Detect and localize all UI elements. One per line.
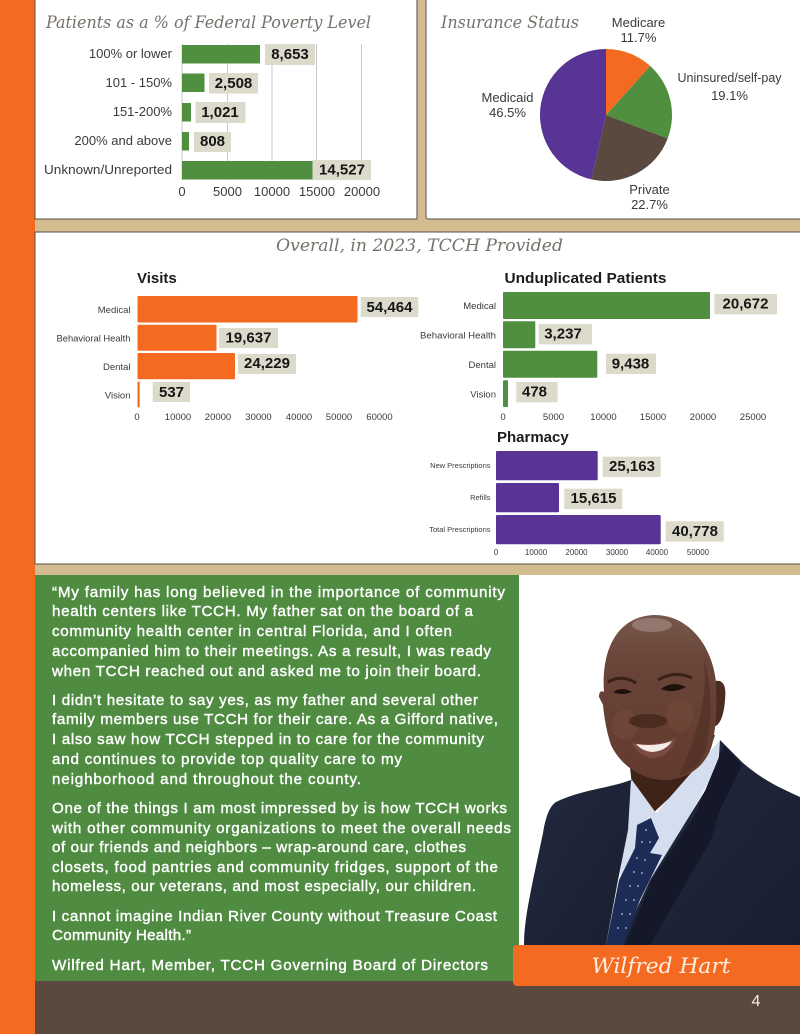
head: [599, 615, 716, 780]
quote paragraph 1: health centers like TCCH. My father sat on the board of a: [52, 603, 474, 620]
chart: unduplicated patients: Vision: [470, 390, 496, 400]
panel: patients as a percent of federal poverty level: [35, 0, 417, 219]
poverty level bar chart: 151-200%: [113, 104, 172, 119]
chart: pharmacy: 30000: [606, 548, 629, 557]
brows: [608, 674, 692, 683]
quote paragraph 1: when TCCH reached out and asked me to join their board.: [51, 663, 481, 680]
heading: poverty level: Patients as a % of Federal Poverty Level: [45, 13, 371, 33]
chart: pharmacy: Total Prescriptions: [429, 525, 491, 534]
chart: visits: 60000: [366, 412, 393, 423]
quote paragraph 4: [52, 908, 498, 944]
pie labels: 19.1%: [711, 88, 748, 103]
chart: visits: 30000: [245, 412, 272, 423]
chart: pharmacy: 0: [494, 548, 499, 557]
quote paragraph 1: “My family has long believed in the importance of community: [52, 584, 505, 601]
chart: pharmacy: New Prescriptions: [430, 461, 491, 470]
chart: visits: Behavioral Health: [56, 334, 130, 344]
pie labels: 22.7%: [631, 197, 668, 212]
pie labels: Private: [629, 182, 670, 197]
chart: pharmacy: 10000: [525, 548, 548, 557]
poverty level bar chart: 15000: [299, 184, 335, 199]
chart: unduplicated patients: 25000: [740, 412, 766, 423]
poverty level bar chart: 0: [178, 184, 186, 199]
pie labels: 11.7%: [621, 30, 657, 45]
pie labels: 46.5%: [489, 105, 526, 120]
panel: quote: [35, 575, 519, 981]
quote paragraph 2: I also saw how TCCH stepped in to care for the community: [52, 731, 484, 748]
chart: pharmacy: 40000: [646, 548, 669, 557]
chart: unduplicated patients: 10000: [590, 412, 617, 423]
chart: pharmacy: 20000: [565, 548, 588, 557]
chart: visits: 19,637: [226, 330, 271, 346]
chart: visits: [56, 270, 418, 423]
eyes: [613, 684, 686, 694]
poverty level bar chart: 100% or lower: [89, 46, 173, 61]
quote paragraph 2: neighborhood and throughout the county.: [52, 771, 361, 788]
chart: unduplicated patients: 3,237: [544, 326, 582, 342]
chart: visits: Medical: [98, 305, 130, 316]
chart: unduplicated patients: 15000: [640, 412, 666, 423]
page number: 4: [752, 993, 761, 1010]
tie: [606, 818, 662, 945]
lapel shadow: [625, 745, 742, 945]
poverty level bar chart: 1,021: [201, 104, 239, 121]
poverty level bar chart: [44, 44, 380, 199]
quote paragraph 4: Community Health.”: [52, 927, 191, 944]
chart: visits: 50000: [326, 412, 352, 423]
quote paragraph 3: homeless, our veterans, and most especially, our children.: [52, 878, 476, 895]
chart: pharmacy: 40,778: [672, 523, 718, 540]
chart: visits: 40000: [286, 412, 312, 423]
face shadow right: [678, 660, 711, 777]
poverty level bar chart: 10000: [254, 184, 290, 199]
chart: unduplicated patients: 5000: [543, 412, 564, 423]
chart: unduplicated patients: 9,438: [612, 356, 649, 372]
quote paragraph 4: I cannot imagine Indian River County without Treasure Coast: [52, 908, 498, 925]
quote paragraph 3: One of the things I am most impressed by is how TCCH works: [52, 800, 507, 817]
panel: insurance status: [426, 0, 800, 219]
chart: unduplicated patients: 20,672: [723, 296, 768, 312]
quote paragraph 2: I didn’t hesitate to say yes, as my father and several other: [52, 692, 478, 709]
chart: visits: 24,229: [244, 355, 290, 372]
chart: pharmacy: 15,615: [571, 490, 616, 507]
heading: unduplicated patients: Unduplicated Patients: [504, 270, 666, 287]
chart: visits: 54,464: [367, 299, 413, 316]
chart: visits: 10000: [165, 412, 191, 423]
chart: pharmacy: 25,163: [609, 458, 655, 475]
chart: unduplicated patients: Dental: [469, 360, 496, 371]
attribution: Wilfred Hart, Member, TCCH Governing Board of Directors: [52, 957, 488, 974]
poverty level bar chart: 808: [200, 133, 225, 150]
poverty level bar chart: 200% and above: [74, 133, 172, 148]
ear: [712, 681, 725, 727]
footer band: [35, 981, 800, 1034]
quote paragraph 1: community health center in central Florida, and I often: [52, 623, 452, 640]
chart: visits: 0: [134, 412, 140, 423]
cheek highlight: [612, 710, 638, 740]
scalp highlight: [632, 618, 672, 632]
poverty level bar chart: 14,527: [319, 162, 365, 178]
teeth: [636, 741, 672, 752]
chart: unduplicated patients: [420, 270, 777, 423]
neck: [628, 735, 715, 814]
poverty level bar chart: 20000: [344, 184, 380, 199]
quote paragraph 2: [52, 692, 498, 788]
quote paragraph 3: with other community organizations to meet the overall needs: [51, 820, 511, 837]
pie labels: Medicaid: [481, 90, 534, 105]
quote paragraph 3: of our friends and neighbors – wrap-around care, clothes: [52, 839, 466, 856]
photo background: [519, 575, 800, 950]
pie labels: Uninsured/self-pay: [678, 70, 782, 85]
quote paragraph 3: closets, food pantries and community fridges, support of the: [52, 859, 498, 876]
chart: pharmacy: Refills: [470, 493, 491, 502]
chart: unduplicated patients: 20000: [690, 412, 716, 423]
quote paragraph 3: [51, 800, 511, 895]
panel: overall in 2023: [35, 232, 800, 564]
chart: visits: Vision: [105, 390, 130, 402]
chart: visits: 20000: [205, 412, 231, 423]
shirt: [620, 740, 720, 880]
chart: unduplicated patients: Medical: [463, 301, 496, 312]
chart: unduplicated patients: 0: [500, 412, 506, 423]
pie labels: [481, 15, 782, 212]
quote paragraph 1: accompanied him to their meetings. As a result, I was ready: [52, 643, 491, 660]
chart: visits: 537: [159, 384, 184, 401]
nose: [629, 714, 667, 728]
poverty level bar chart: 2,508: [215, 75, 252, 92]
chart: unduplicated patients: Behavioral Health: [420, 330, 496, 342]
name banner: [513, 945, 800, 986]
poverty level bar chart: Unknown/Unreported: [44, 162, 172, 177]
poverty level bar chart: 5000: [213, 184, 242, 199]
pie labels: Medicare: [612, 15, 665, 30]
portrait: Wilfred Hart: [524, 615, 800, 945]
quote paragraph 1: [51, 584, 505, 680]
poverty level bar chart: 101 - 150%: [106, 75, 172, 90]
jacket left: [524, 780, 631, 945]
heading: pharmacy: Pharmacy: [497, 429, 569, 446]
pie chart: [540, 49, 672, 181]
quote paragraph 2: and continues to provide top quality care to my: [52, 751, 402, 768]
tie dots: [617, 829, 651, 929]
chart: pharmacy: [429, 429, 724, 557]
chart: unduplicated patients: 478: [522, 384, 547, 400]
heading: visits: Visits: [137, 270, 177, 287]
chart: visits: Dental: [103, 362, 130, 373]
chart: pharmacy: 50000: [687, 548, 710, 557]
jacket right: [620, 740, 800, 945]
mouth: [632, 738, 676, 758]
poverty level bar chart: 8,653: [271, 46, 309, 63]
quote paragraph 2: family members use TCCH for their care. As a Gifford native,: [52, 711, 498, 728]
heading: insurance status: Insurance Status: [440, 13, 579, 33]
orange side strip: [0, 0, 35, 1034]
heading: overall: Overall, in 2023, TCCH Provided: [276, 236, 563, 256]
name banner: Wilfred Hart: [592, 954, 731, 978]
